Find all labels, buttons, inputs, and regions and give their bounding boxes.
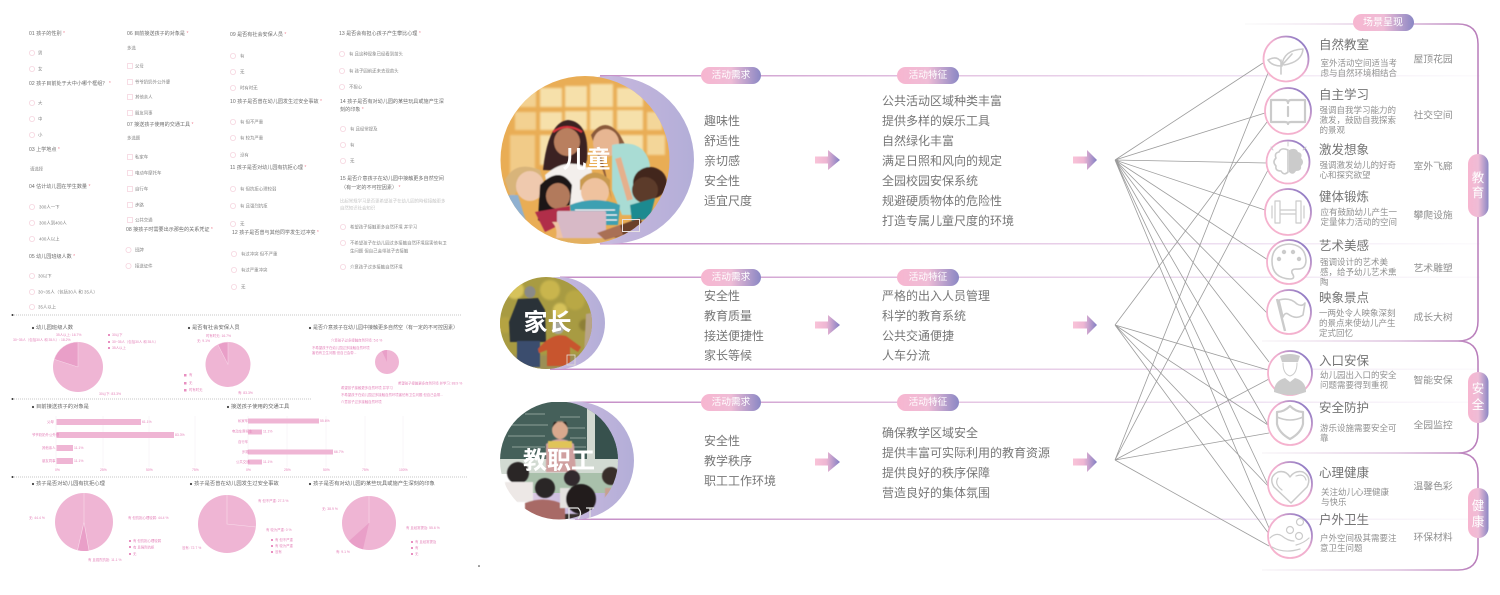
questionnaire column 2: 班牌 (135, 246, 144, 254)
chart: security staff pie: 有 (189, 372, 193, 377)
icon: brain (1266, 140, 1310, 184)
chart: resistance pie: 无: 44.4 % (29, 516, 45, 520)
chart: safety accident pie: 有 但不严重 (275, 537, 294, 542)
questionnaire column 1: 03 上学地点 * (29, 146, 60, 153)
photo watermark square (622, 220, 640, 232)
middle boy (580, 172, 610, 190)
chart: toy impression pie: 无 (415, 552, 419, 556)
chart: transport bars: 自行车 (238, 439, 249, 444)
chart: resistance pie: 有 且强烈抗拒 (133, 544, 155, 550)
panel: parents group (497, 277, 605, 370)
chart: nature contact pie: 不希望孩子在幼儿园过多接触自然环境害怕有卫生问题 但自己会带... (341, 392, 443, 397)
questionnaire column 2: 爷爷奶奶外公外婆 (135, 78, 171, 86)
scene: entrance security: 幼儿园出入口的安全 (1320, 370, 1397, 380)
chart: nature contact pie (309, 324, 462, 404)
questionnaire column 3: 有 (240, 52, 245, 60)
text: children needs: 亲切感 (704, 153, 740, 168)
icon: guard (1268, 351, 1312, 395)
column headers: activity needs and activity features: 活动需求 (712, 69, 751, 81)
scene: fitness: 应有鼓励幼儿产生一 (1320, 207, 1398, 217)
chart: nature contact pie: 希望孩子接触更多自然环境 并学习: 88.9 % (398, 380, 462, 386)
text: parents needs: 家长等候 (704, 348, 752, 362)
panel: children group (500, 76, 694, 248)
text: children needs: 舒适性 (704, 134, 740, 148)
chart: class size pie: 35人以上 (112, 345, 127, 350)
questionnaire column 3: 无 (240, 70, 245, 76)
text: children needs (704, 113, 752, 208)
questionnaire column 2: 其他亲人 (135, 94, 153, 100)
chart: resistance pie: 孩子是否对幼儿园有抗拒心理 (36, 479, 106, 487)
questionnaire column 1: 400人以上 (39, 236, 60, 242)
chart: transport bars: 私家车 (238, 418, 249, 423)
chart: toy impression pie: 无: 38.9 % (322, 507, 338, 511)
chart: security staff pie: 时有时无: 16.7% (206, 333, 231, 338)
chart: resistance pie: 无 (133, 552, 137, 556)
text: parents features: 严格的出入人员管理 (882, 288, 990, 303)
text: staff features: 提供丰富可实际利用的教育资源 (882, 445, 1050, 460)
chart: class size pie: 35人以上: 16.7% (56, 332, 81, 337)
chart: transport bars: 11.1% (263, 430, 272, 434)
scene: spark imagination: 强调激发幼儿的好奇 (1320, 160, 1397, 170)
questionnaire column 1: 大 (38, 100, 43, 106)
scene: safety protection (1268, 400, 1453, 445)
questionnaire column 3: 12 孩子是否曾与其他同学发生过冲突 * (232, 229, 319, 236)
band lines and scene frame (550, 24, 1480, 570)
chart: resistance pie (29, 479, 169, 562)
chart: safety accident pie: 有 较为严重: 0 % (266, 527, 292, 532)
photo watermark marks (569, 508, 594, 519)
scene: mental health: 关注幼儿心理健康 (1321, 487, 1390, 497)
chart: nature contact pie: 介意孩子过多接触自然环境: 5.6 % (331, 338, 382, 342)
text: parents needs: 安全性 (704, 288, 740, 303)
questionnaire column 2: 自行车 (135, 186, 149, 192)
scene: spark imagination (1266, 140, 1453, 184)
group name: children: 儿童 (562, 146, 610, 174)
scene: spark imagination: 激发想象 (1319, 142, 1369, 157)
group name: staff: 教职工 (523, 448, 595, 474)
chart: toy impression pie: 有 且经常提及 (415, 539, 437, 544)
chart: transport bars: 50% (323, 468, 330, 472)
icon: dumbbell (1265, 189, 1311, 235)
questionnaire column 1: 300人到400人 (39, 220, 67, 226)
chart: toy impression pie: 有 且经常提及: 55.6 % (406, 525, 440, 530)
questionnaire column 2: 公共交通 (135, 216, 153, 224)
chart: toy impression pie: 有 (415, 545, 419, 550)
questionnaire column 1: 01 孩子的性别 * (29, 30, 65, 37)
chart: pickup person bars: 父母 (47, 419, 54, 424)
text: children needs: 适宜尺度 (704, 193, 752, 208)
questionnaire column 4: 有 且经常提及 (350, 126, 378, 132)
chart: nature contact pie: 是否介意孩子在幼儿园中接触更多自然空（有一定的不可控因素） (313, 324, 458, 331)
questionnaire column 4 (339, 30, 447, 270)
text: staff needs: 安全性 (704, 433, 740, 448)
chart: nature contact pie: 不希望孩子在幼儿园过多接触自然环境 (312, 345, 370, 350)
chart: transport bars: 接送孩子使用的交通工具 (231, 402, 290, 410)
scene: entrance security: 入口安保 (1319, 353, 1370, 368)
questionnaire column 4: （有一定的不可控因素） * (341, 184, 400, 191)
chart: transport bars: 55.6% (320, 419, 330, 423)
panel: questionnaire form (29, 30, 447, 310)
icon: heart (1268, 462, 1312, 506)
questionnaire column 3: 11 孩子是否对幼儿园有抗拒心理 * (230, 164, 306, 171)
questionnaire column 3: 有过严重冲突 (241, 266, 268, 274)
side tag: safety: 安 (1472, 381, 1484, 396)
chart: safety accident pie: 有 但不严重: 27.3 % (258, 498, 288, 503)
chart: security staff pie: 无 (189, 381, 193, 385)
chart: transport bars: 公共交通 (236, 459, 250, 464)
questionnaire column 2: 步路 (135, 202, 144, 208)
chart: class size pie (13, 323, 158, 396)
questionnaire column 2: 电动车摩托车 (135, 170, 162, 176)
scene: memorable spots: 的景点来使幼儿产生 (1319, 318, 1396, 328)
questionnaire column 1: 02 孩子目前处于大中小哪个框组？ * (29, 80, 111, 87)
chart: nature contact pie: 害怕有卫生问题 但自己会带... (312, 350, 357, 355)
chart: resistance pie: 有 但抗拒心理较弱 (133, 538, 162, 543)
text: staff needs: 职工工作环境 (704, 473, 776, 488)
heading pill: scene presentation (1353, 14, 1414, 31)
middle dark-hair girl (538, 175, 572, 225)
scene: safety protection: 安全防护 (1319, 400, 1369, 415)
chart: pickup person bars: 83.3% (175, 433, 185, 437)
questionnaire column 3: 时有时无 (240, 84, 258, 92)
side tag: health: 健 (1472, 499, 1485, 513)
text: parents features: 科学的教育系统 (882, 308, 966, 323)
questionnaire column 2: 父母 (135, 64, 144, 70)
scene: outdoor hygiene: 户外空间极其需要注 (1320, 533, 1397, 543)
chart: pickup person bars: 25% (100, 468, 107, 472)
text: children needs: 安全性 (704, 173, 740, 188)
scene: mental health: 温馨色彩 (1414, 480, 1453, 492)
scene: fitness: 健体锻炼 (1319, 189, 1369, 204)
text: parents needs: 教育质量 (704, 308, 752, 323)
questionnaire column 1: 男 (38, 50, 42, 56)
icon: sprout (1264, 36, 1308, 82)
scene: art: 陶 (1320, 277, 1329, 287)
questionnaire column 4: 有 且这种现象已经看到苗头 (349, 50, 404, 58)
chart: nature contact pie: 介意孩子过多接触自然环境 (341, 399, 382, 404)
scene: self study: 的景观 (1320, 125, 1346, 135)
icon: shield (1268, 401, 1312, 445)
girl back left (543, 120, 587, 172)
chart: transport bars: 11.1% (263, 460, 272, 464)
text: staff features (882, 425, 1050, 500)
questionnaire column 2: 08 接孩子时需要出示那些的关系凭证 * (126, 226, 213, 233)
side tag: education (1468, 154, 1488, 217)
chart: transport bars: 步路 (242, 449, 249, 454)
chart: pickup person bars: 0% (55, 468, 60, 472)
side tag: education: 育 (1472, 185, 1484, 200)
scene: memorable spots: 定式回忆 (1319, 328, 1354, 338)
scene: fitness: 攀爬设施 (1414, 208, 1453, 222)
questionnaire column 4: 不担心 (349, 84, 363, 90)
questionnaire column 3: 09 是否有社会安保人员 * (230, 31, 286, 38)
text: children needs: 趣味性 (704, 113, 740, 128)
scene: safety protection: 全园监控 (1414, 418, 1453, 432)
questionnaire column 3: 有 且强烈抗拒 (240, 202, 268, 210)
chart: pickup person bars (32, 402, 199, 472)
side tag: safety: 全 (1472, 397, 1485, 412)
side tag: education: 教 (1472, 170, 1485, 185)
scene: self study: 激发，鼓励自我探索 (1320, 115, 1396, 125)
text: parents features: 公共交通便捷 (882, 328, 954, 343)
side tag: safety (1468, 372, 1488, 423)
questionnaire column 1: 30~35人（包括30人 和 35人） (38, 288, 98, 296)
chart: security staff pie: 时有时无 (189, 387, 203, 392)
chart: class size pie: 30~35人（包括30人 和 35人） (112, 339, 158, 344)
scene: safety protection: 游乐设施需要安全可 (1320, 423, 1397, 433)
chart: pickup person bars: 11.1% (74, 446, 83, 450)
questionnaire column 1: 35人以上 (38, 304, 57, 310)
text: children features: 自然绿化丰富 (882, 133, 954, 148)
scene: outdoor hygiene: 户外卫生 (1319, 512, 1369, 527)
chart: pickup person bars: 50% (146, 468, 153, 472)
text: children features: 规避硬质物体的危险性 (882, 193, 1002, 208)
chart: safety accident pie: 孩子是否曾在幼儿园发生过安全事故 (194, 479, 279, 487)
chart: nature contact pie: 希望孩子接触更多自然环境 并学习 (341, 385, 393, 390)
photo: classroom (500, 402, 620, 530)
questionnaire column 3: 有过冲突 但不严重 (241, 250, 278, 258)
scene: outdoor hygiene: 意卫生问题 (1320, 543, 1363, 553)
questionnaire column 4: 有 (350, 142, 355, 148)
scene: entrance security: 智能安保 (1414, 374, 1453, 386)
questionnaire column 4: 无 (350, 158, 355, 164)
column headers: activity needs and activity features (701, 67, 959, 411)
scene: mental health: 与快乐 (1321, 497, 1347, 507)
chart: resistance pie: 有 但抗拒心理较弱: 44.4 % (128, 515, 169, 520)
questionnaire column 1 (29, 30, 111, 310)
chart: pickup person bars: 11.1% (74, 459, 83, 463)
questionnaire column 1: 05 幼儿园班级人数 * (29, 253, 75, 260)
questionnaire column 2 (126, 30, 213, 270)
scene: outdoor hygiene (1268, 512, 1453, 558)
chart: security staff pie (184, 323, 253, 395)
questionnaire column 1: 中 (38, 116, 42, 122)
crescent (516, 402, 634, 520)
column headers: activity needs and activity features: 活动需求 (712, 271, 751, 283)
chart: safety accident pie: 有 较为严重 (275, 543, 294, 548)
text: parents needs (704, 288, 764, 362)
scene: nature classroom: 室外活动空间适当考 (1320, 58, 1397, 68)
icon: flag (1267, 290, 1311, 334)
scene: memorable spots: 成长大树 (1414, 310, 1453, 324)
chart: class size pie: 30~35人（包括30人 和 35人）: 18.2% (13, 337, 71, 342)
questionnaire column 2: 私家车 (135, 154, 149, 160)
scene: self study: 社交空间 (1414, 108, 1453, 122)
chart: transport bars (227, 402, 408, 472)
arrows: features to scenes (1073, 150, 1097, 472)
text: staff features: 营造良好的集体氛围 (882, 485, 990, 500)
questionnaire column 2: 接送证件 (135, 262, 153, 270)
icon: hand with bubbles (1268, 514, 1312, 558)
scene: nature classroom: 屋顶花园 (1414, 52, 1453, 66)
questionnaire column 4: 13 是否会有担心孩子产生攀比心理 * (339, 30, 421, 37)
questionnaire column 3: 无 (241, 284, 246, 290)
questionnaire column 3 (230, 31, 322, 290)
chart: transport bars: 75% (362, 468, 369, 472)
questionnaire column 4: 有 孩子园前还未去现苗头 (349, 68, 399, 74)
questionnaire column 1: 女 (38, 66, 43, 72)
chart: resistance pie: 有 且强烈抗拒: 11.1 % (88, 557, 121, 562)
photo watermark square (567, 355, 575, 365)
chart: safety accident pie (182, 479, 294, 554)
questionnaire column 4: 生问题 但自己会带孩子去接触 (350, 248, 409, 254)
column headers: activity needs and activity features: 活动特征 (909, 396, 948, 408)
chart: pickup person bars: 爷爷奶奶外公外婆 (32, 432, 60, 437)
chart: transport bars: 66.7% (334, 450, 344, 454)
text: parents features (882, 288, 990, 362)
chart: pickup person bars: 61.1% (142, 420, 152, 424)
questionnaire column 1: 小 (38, 132, 43, 138)
text: staff features: 提供良好的秩序保障 (882, 465, 990, 480)
questionnaire column 2: 07 接送孩子使用的交通工具 * (127, 121, 194, 128)
chart: transport bars: 电动车摩托车 (232, 428, 253, 434)
questionnaire column 1: 30以下 (38, 274, 52, 280)
photo: children with tablet (500, 76, 670, 248)
questionnaire column 1: 300人一下 (39, 204, 60, 210)
questionnaire column 3: 有 但抗拒心理较弱 (240, 186, 277, 192)
scene: self study: 自主学习 (1319, 87, 1369, 102)
text: children features: 打造专属儿童尺度的环境 (882, 213, 1014, 228)
crescent (513, 277, 605, 369)
chart: toy impression pie: 有: 9.1 % (336, 549, 350, 554)
scene: self study (1265, 87, 1453, 135)
left blond girl (505, 166, 545, 196)
chart: security staff pie: 是否有社会安保人员 (192, 323, 240, 331)
panel: staff group (500, 402, 634, 530)
scene: self study: 强调自我学习能力的 (1320, 105, 1396, 115)
questionnaire column 3: 10 孩子是否曾在幼儿园发生过安全事故 * (230, 98, 322, 105)
scene: art: 艺术雕塑 (1414, 262, 1453, 274)
questionnaire column 1: 04 估计幼儿园在学生数量 * (29, 183, 90, 190)
questionnaire column 4: 自然知识社会知识 (340, 204, 376, 212)
chart: pickup person bars: 其他亲人 (42, 445, 56, 450)
scene: safety protection: 靠 (1320, 433, 1329, 443)
text: children features: 公共活动区域种类丰富 (882, 93, 1002, 108)
text: children features: 全园校园安保系统 (882, 173, 978, 188)
questionnaire column 2: 朋友同事 (135, 110, 153, 116)
chart: safety accident pie: 没有 (275, 549, 282, 554)
chart: pickup person bars: 朋友同事 (42, 458, 56, 463)
chart: safety accident pie: 没有: 72.7 % (182, 545, 201, 550)
chart: pickup person bars: 75% (192, 468, 199, 472)
questionnaire column 2: 多选题 (127, 134, 141, 142)
questionnaire column 4: 不希望孩子在幼儿园过多接触自然环境届害他有卫 (350, 240, 447, 246)
scene: mental health (1268, 462, 1453, 507)
icon: open book (1265, 88, 1311, 134)
chart: class size pie: 30以下: 83.3% (99, 392, 121, 396)
questionnaire column 1: 请选择 (30, 166, 44, 172)
questionnaire column 4: 希望孩子接触更多自然环境 并学习 (350, 224, 417, 230)
right boy (633, 167, 667, 199)
text: parents needs: 接送便捷性 (704, 328, 764, 343)
heading pill: scene presentation: 场景呈现 (1363, 16, 1403, 28)
chart: security staff pie: 有: 83.3% (238, 390, 253, 395)
arrows: needs to features (815, 150, 840, 472)
scene: mental health: 心理健康 (1319, 465, 1370, 480)
scene: entrance security (1268, 351, 1453, 395)
questionnaire column 4: 比起常规学习是否更希望孩子在幼儿园的時候接触更多 (340, 198, 446, 204)
scene: memorable spots (1267, 290, 1453, 338)
side tag: health: 康 (1472, 514, 1485, 529)
scene: art: 强调设计的艺术美 (1320, 257, 1389, 267)
text: staff features: 确保教学区域安全 (882, 425, 978, 440)
scene: art (1267, 238, 1453, 287)
scene: spark imagination: 心和探究欲望 (1320, 170, 1371, 180)
chart: security staff pie: 无: 9.1% (197, 339, 210, 343)
scene: nature classroom (1264, 36, 1453, 82)
scene: nature classroom: 自然教室 (1319, 37, 1369, 52)
questionnaire column 3: 没有 (240, 152, 249, 158)
questionnaire column 4: 刻的印象 * (340, 106, 364, 113)
questionnaire column 4: 14 孩子是否有对幼儿园的某些玩具或施产生深 (340, 98, 444, 105)
text: children features (882, 93, 1014, 228)
text: children features: 提供多样的娱乐工具 (882, 113, 990, 128)
scene: spark imagination: 室外飞廊 (1414, 160, 1453, 172)
scene: nature classroom: 虑与自然环境相结合 (1320, 68, 1398, 78)
column headers: activity needs and activity features: 活动需求 (712, 396, 751, 408)
scene: memorable spots: 映象景点 (1319, 291, 1369, 305)
chart: transport bars: 100% (399, 468, 408, 472)
questionnaire column 3: 无 (240, 222, 245, 228)
questionnaire column 3: 有 较为严重 (240, 134, 264, 142)
scene: art: 感，给予幼儿艺术熏 (1320, 267, 1397, 277)
scene: art: 艺术美感 (1319, 238, 1369, 253)
chart: toy impression pie: 孩子是否有对幼儿园的某些玩具或施产生深刻的印象 (313, 479, 436, 487)
girl back right (591, 125, 628, 200)
chart: toy impression pie (309, 479, 440, 556)
chart: class size pie: 30以下 (112, 333, 123, 337)
icon: palette (1267, 240, 1311, 284)
chart: class size pie: 幼儿园班级人数 (36, 323, 74, 331)
scene: fitness: 定量体力活动的空间 (1320, 217, 1397, 227)
chart: pickup person bars: 目前接送孩子的对象是 (36, 402, 90, 410)
chart: transport bars: 25% (284, 468, 291, 472)
column headers: activity needs and activity features: 活动特征 (909, 271, 948, 283)
questionnaire column 4: 介意孩子过多接触自然环境 (350, 264, 403, 270)
tablet (557, 211, 606, 239)
scene: outdoor hygiene: 环保材料 (1414, 530, 1453, 544)
chart: transport bars: 0% (246, 468, 251, 472)
network lines linking groups to scenes (1115, 63, 1269, 546)
text: children features: 满足日照和风向的规定 (882, 153, 1002, 168)
scene: entrance security: 问题需要得到重视 (1320, 380, 1389, 390)
questionnaire column 3: 有 但不严重 (240, 118, 264, 126)
text: staff needs: 教学秩序 (704, 453, 752, 468)
questionnaire column 2: 多选 (127, 44, 136, 52)
photo: parents walking (497, 277, 596, 370)
crescent (526, 76, 694, 244)
text: parents features: 人车分流 (882, 348, 930, 362)
scene: fitness (1265, 189, 1453, 235)
group name: parents: 家长 (524, 310, 572, 336)
questionnaire column 4: 15 是否介意孩子在幼儿园中接触更多自然空间 (340, 175, 444, 182)
side tag: health (1468, 488, 1488, 538)
scene: memorable spots: 一两处令人映象深刻 (1319, 308, 1396, 318)
questionnaire column 2: 06 目前接送孩子的对象是 * (127, 30, 188, 37)
text: staff needs (704, 433, 776, 488)
column headers: activity needs and activity features: 活动特征 (909, 69, 948, 81)
